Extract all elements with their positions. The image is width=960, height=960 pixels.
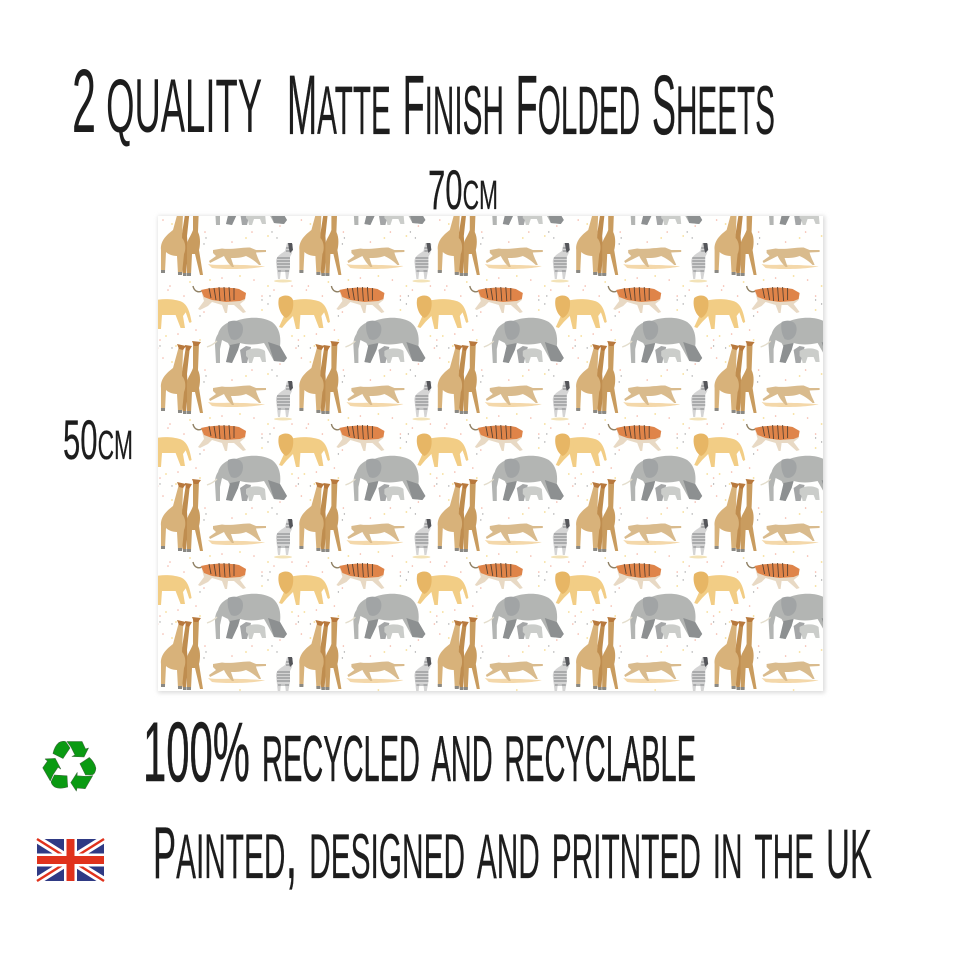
icon: union jack flag: [37, 839, 104, 881]
text: recycled claim: [143, 697, 696, 801]
height label: 50cm: 50cm: [63, 407, 133, 472]
width label: 70cm: 70cm: [428, 157, 498, 222]
text: recycled claim: 100%: [143, 705, 250, 799]
title: 2 quality: 2 QUALITY: [72, 52, 262, 152]
title: matte finish folded sheets: Matte Finish Folded Sheets: [287, 45, 775, 155]
panel: animal pattern sheet: [156, 214, 826, 694]
icon: recycling arrows: [39, 741, 100, 794]
